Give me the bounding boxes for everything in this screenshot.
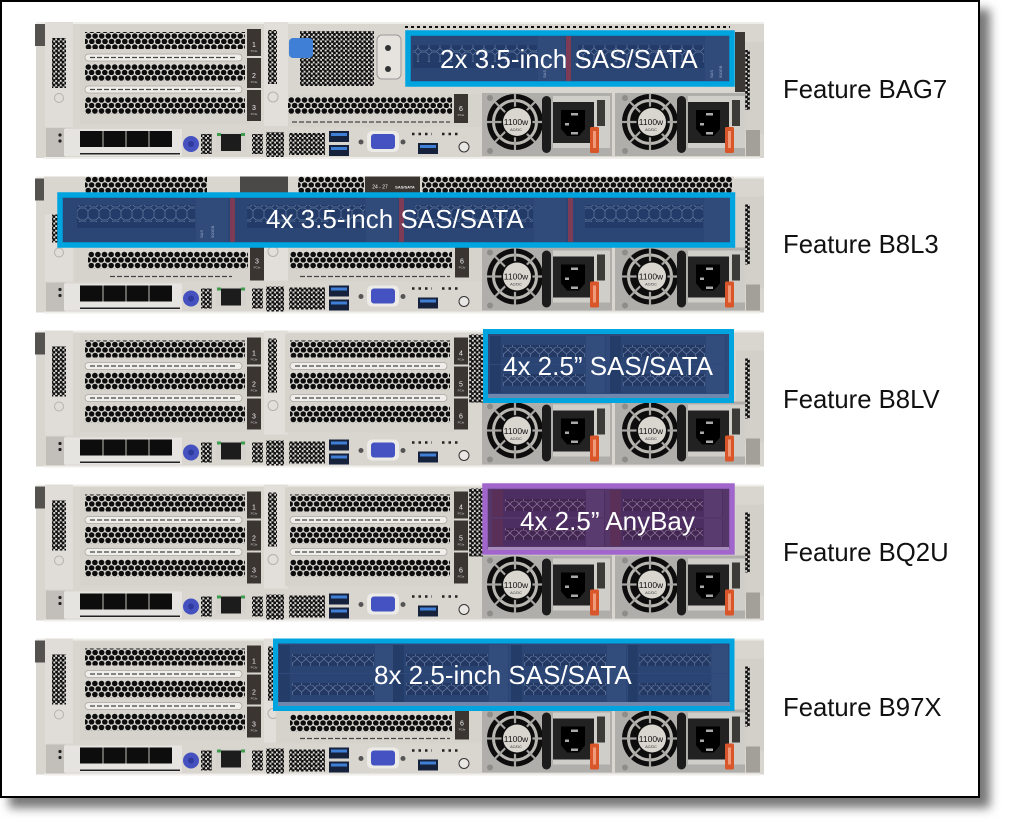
psu labels: AC/DC	[645, 128, 657, 132]
drive bay callout: 2x 3.5-inch SAS/SATA	[408, 33, 732, 84]
psu labels: 1100w	[639, 580, 664, 590]
server row: Feature BAG7: 6	[459, 106, 463, 113]
feature label BAG7: Feature BAG7	[783, 76, 947, 104]
drive bay callout: 4x 2.5 AnyBay: 4x 2.5” AnyBay	[520, 506, 695, 536]
psu labels	[504, 272, 664, 286]
server row: Feature B8LV: 6	[459, 414, 463, 420]
psu labels	[504, 426, 664, 441]
psu labels: AC/DC	[510, 437, 522, 441]
psu labels: AC/DC	[645, 437, 657, 441]
server row: Feature BQ2U	[35, 484, 764, 622]
server row: Feature BAG7: PCIe	[458, 113, 465, 117]
server row: Feature BQ2U: PCIe	[458, 542, 465, 546]
server row: Feature BQ2U: 6	[459, 568, 463, 574]
drive bay callout: 4x 2.5 SAS/SATA	[486, 332, 732, 400]
psu labels	[504, 734, 664, 749]
psu labels: 1100w	[504, 117, 529, 127]
server row: Feature BQ2U: PCIe	[251, 512, 258, 516]
server row: Feature BAG7: 2	[252, 73, 256, 80]
drive bay callout: 8x 2.5-inch SAS/SATA: 8x 2.5-inch SAS/SATA	[374, 660, 632, 690]
psu labels: AC/DC	[645, 745, 657, 749]
psu labels: 1100w	[504, 734, 529, 744]
psu labels: AC/DC	[645, 591, 657, 595]
server row: Feature BQ2U: PCIe	[251, 542, 258, 546]
server row: Feature B8LV: PCIe	[251, 358, 258, 362]
drive bay callout: 2x 3.5-inch SAS/SATA: 500GB	[718, 65, 723, 78]
server row: Feature BQ2U: PCIe	[458, 574, 465, 578]
server row: Feature BQ2U: 1	[252, 504, 256, 512]
drive bay callout: 2x 3.5-inch SAS/SATA: SAS	[709, 70, 714, 78]
server row: Feature B8LV: 2	[252, 382, 256, 388]
psu labels: AC/DC	[510, 128, 522, 132]
server row: Feature B8LV: 1	[252, 350, 256, 358]
server row: Feature BQ2U: PCIe	[458, 512, 465, 516]
psu labels: AC/DC	[510, 745, 522, 749]
psu labels	[504, 580, 664, 595]
server row: Feature B8L3: 6	[460, 258, 464, 266]
psu labels: 1100w	[639, 426, 664, 436]
server row: Feature B8LV	[35, 330, 764, 468]
server row: Feature BAG7: PCIe	[251, 49, 258, 53]
server row: Feature B97X: 6	[460, 720, 464, 728]
server row: Feature BAG7: 3	[252, 105, 256, 112]
server row: Feature BAG7: PCIe	[251, 112, 258, 116]
feature label B8L3: Feature B8L3	[783, 231, 939, 259]
drive bay callout: 2x 3.5-inch SAS/SATA: 2x 3.5-inch SAS/SATA	[440, 44, 698, 74]
server row: Feature B8L3	[35, 176, 764, 314]
server row: Feature BAG7: 1	[252, 42, 256, 49]
server row: Feature B8L3: 3	[255, 258, 259, 266]
server row: Feature B97X: PCIe	[251, 666, 258, 670]
server row: Feature B8LV: PCIe	[251, 388, 258, 392]
drive bay callout: 4x 2.5 AnyBay	[485, 486, 732, 552]
drive bay callout: 4x 3.5-inch SAS/SATA: 4x 3.5-inch SAS/SATA	[266, 204, 524, 234]
server row: Feature B8LV: 4	[459, 350, 463, 358]
psu labels: 1100w	[639, 734, 664, 744]
psu labels	[504, 117, 664, 132]
server row: Feature B8LV: 5	[459, 382, 463, 388]
psu labels: 1100w	[504, 426, 529, 436]
server row: Feature B97X: 1	[252, 658, 256, 666]
server row: Feature B8L3: PCIe	[254, 266, 261, 270]
psu labels: 1100w	[504, 580, 529, 590]
server row: Feature BQ2U: 2	[252, 536, 256, 542]
server row: Feature BQ2U: 3	[252, 568, 256, 574]
server row: Feature BQ2U: 4	[459, 504, 463, 512]
server row: Feature B97X: 2	[252, 690, 256, 696]
drive bay callout: 2x 3.5-inch SAS/SATA: SAS	[542, 70, 547, 78]
server row: Feature B97X: PCIe	[251, 696, 258, 700]
drive bay callout: 4x 2.5 SAS/SATA: 4x 2.5” SAS/SATA	[503, 351, 714, 381]
server row: Feature BAG7	[35, 22, 764, 159]
server row: Feature B8L3: SAS/SATA	[395, 184, 415, 190]
drive bay callout: 4x 3.5-inch SAS/SATA	[60, 195, 732, 245]
server row: Feature B8LV: 3	[252, 414, 256, 420]
server row: Feature B97X: 3	[252, 722, 256, 728]
server row: Feature B97X: PCIe	[459, 728, 466, 732]
server row: Feature B97X: PCIe	[251, 728, 258, 732]
drive bay callout: 8x 2.5-inch SAS/SATA	[276, 641, 732, 708]
feature label B8LV: Feature B8LV	[783, 386, 940, 414]
server row: Feature B8LV: PCIe	[251, 420, 258, 424]
drive bay callout: 4x 3.5-inch SAS/SATA: 500GB	[210, 225, 215, 238]
feature label BQ2U: Feature BQ2U	[783, 539, 949, 567]
psu labels: 1100w	[504, 272, 529, 282]
psu labels: 1100w	[639, 117, 664, 127]
server row: Feature B8LV: PCIe	[458, 358, 465, 362]
server row: Feature BAG7: PCIe	[251, 80, 258, 84]
server row: Feature B8L3: PCIe	[459, 266, 466, 270]
server row: Feature BQ2U: 5	[459, 536, 463, 542]
psu labels: 1100w	[639, 272, 664, 282]
drive bay callout: 4x 3.5-inch SAS/SATA: SAS	[199, 230, 204, 238]
server row: Feature B8LV: PCIe	[458, 420, 465, 424]
psu labels: AC/DC	[510, 282, 522, 286]
server row: Feature BQ2U: PCIe	[251, 574, 258, 578]
psu labels: AC/DC	[510, 591, 522, 595]
server row: Feature B8LV: PCIe	[458, 388, 465, 392]
psu labels: AC/DC	[645, 282, 657, 286]
feature label B97X: Feature B97X	[783, 694, 942, 722]
server row: Feature B8L3: 24 - 27	[372, 184, 388, 190]
server row: Feature B97X	[35, 638, 764, 776]
